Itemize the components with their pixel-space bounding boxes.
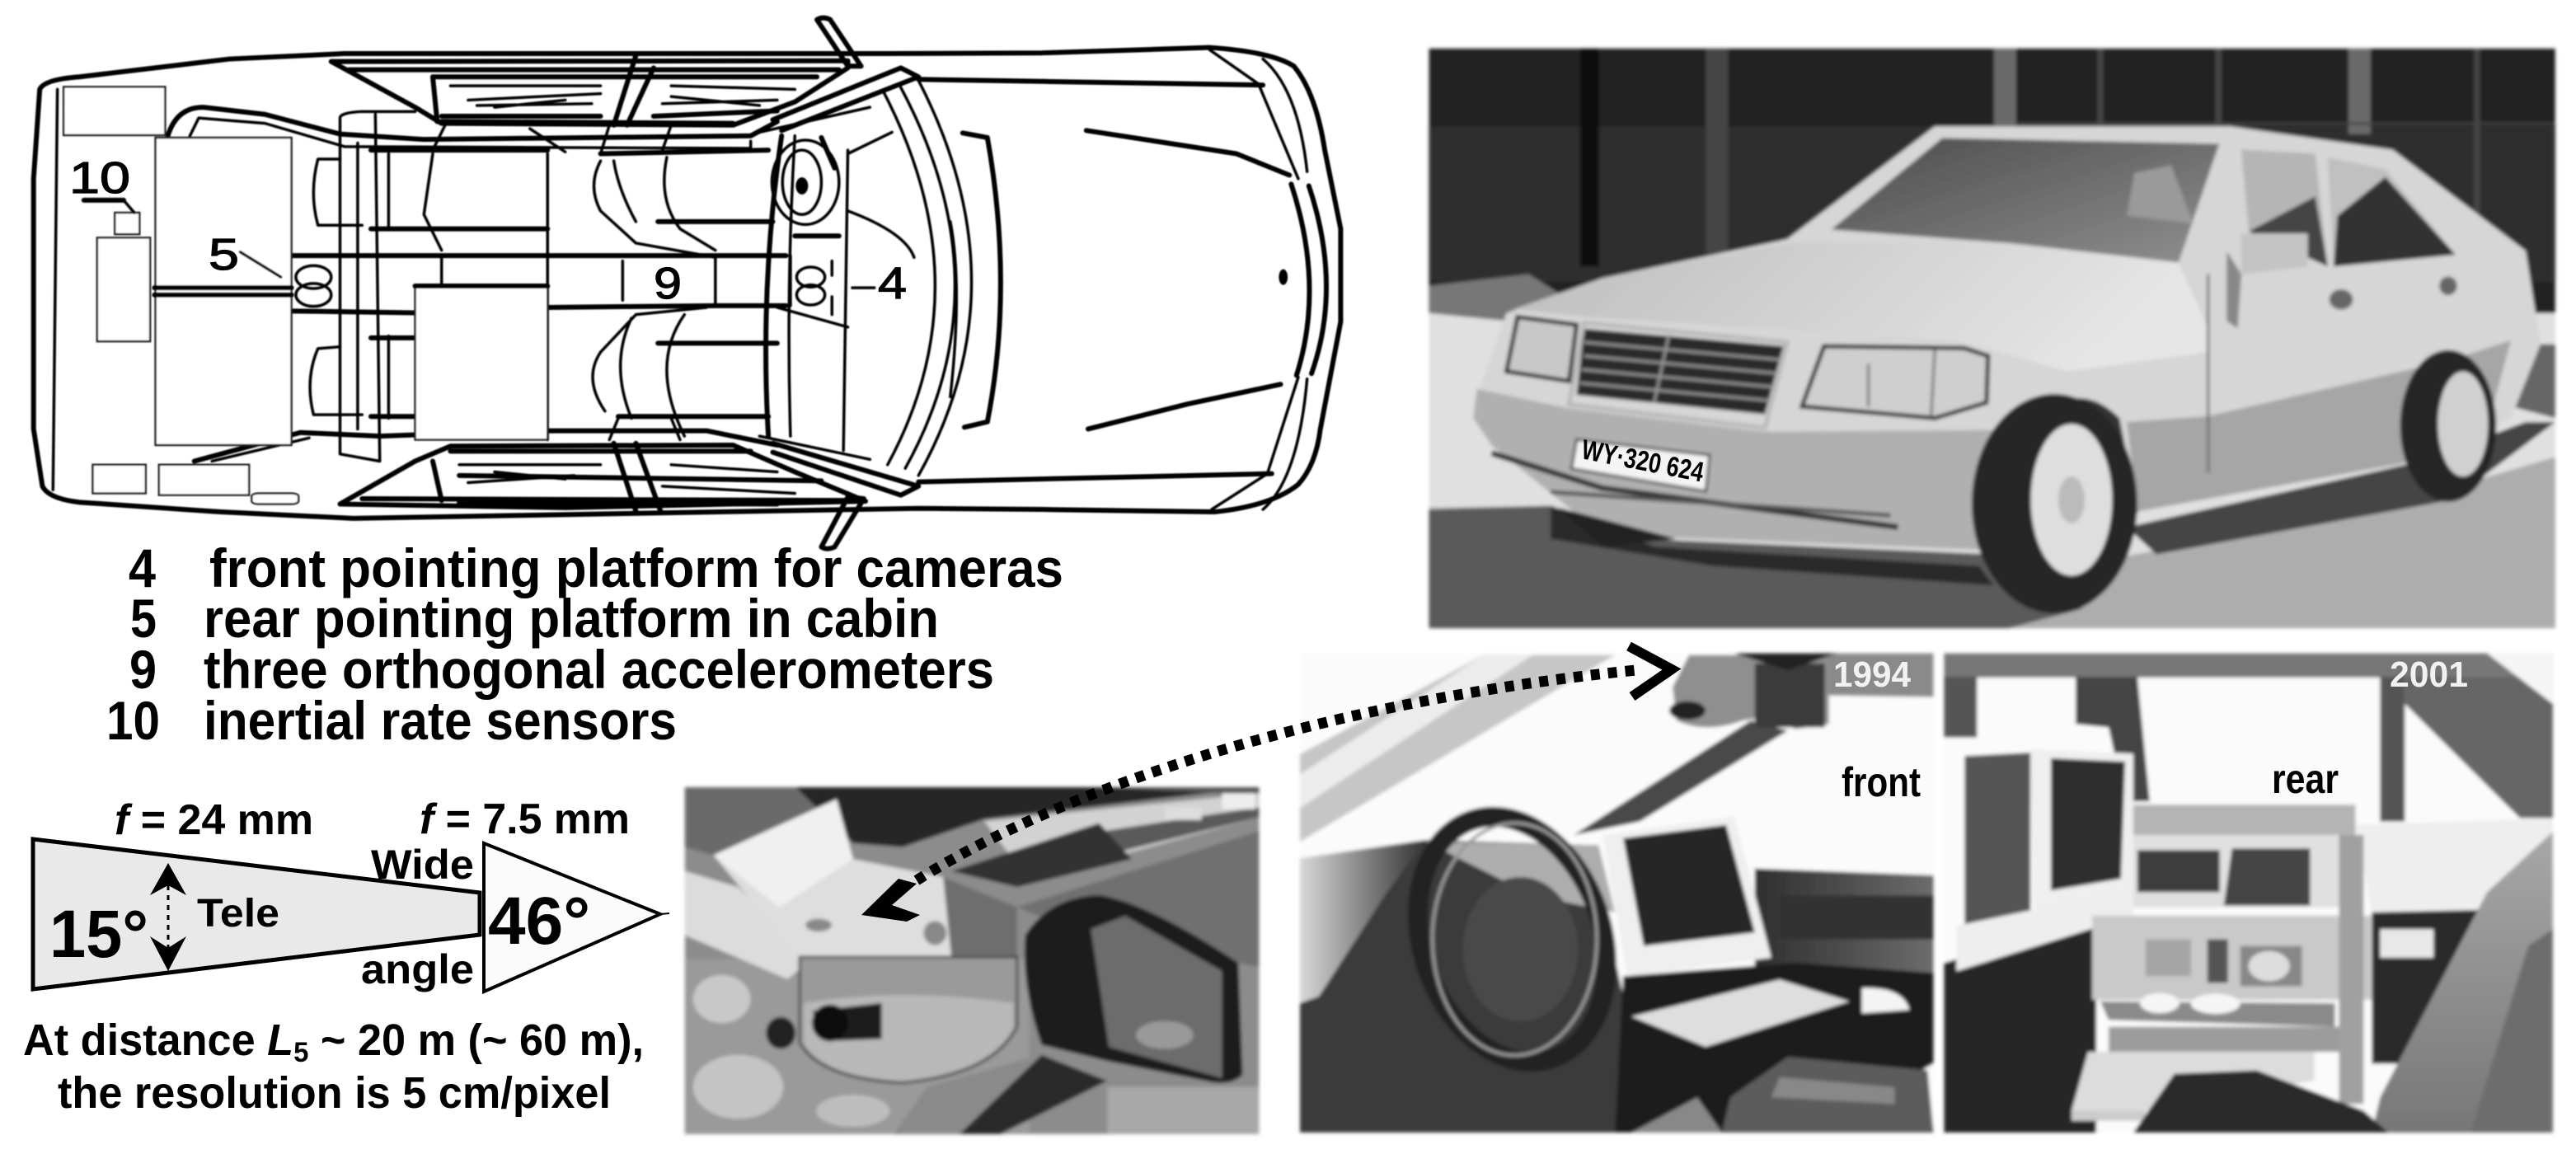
photo captions: rear [2272, 756, 2339, 802]
side windows [2241, 150, 2328, 266]
windscreen [1832, 138, 2219, 262]
a pillars [772, 68, 918, 130]
keyboard [2072, 1052, 2315, 1111]
right seat [2372, 832, 2553, 1133]
field of view diagram: f = 7.5 mm [420, 795, 630, 843]
front seats [594, 157, 716, 257]
steering wheel [1463, 877, 1578, 1021]
monitor [1602, 817, 1771, 976]
door panel [1755, 869, 1933, 1063]
tunnel [292, 256, 786, 312]
legend list: 9 [129, 639, 157, 700]
steering wheel [772, 140, 839, 224]
field of view diagram: 15° [49, 897, 148, 972]
legend list: front pointing platform for cameras [209, 537, 1063, 598]
field of view diagram [23, 795, 669, 1118]
field of view diagram: the resolution is 5 cm/pixel [58, 1068, 611, 1118]
windscreen arcs [883, 81, 972, 476]
resolution note: 5 [293, 1037, 308, 1068]
front wheel [2024, 398, 2138, 551]
photo: vehicle front three-quarter view [1429, 49, 2555, 628]
front left tyre [1558, 508, 1677, 547]
photo captions: front [1842, 759, 1921, 805]
field of view diagram: Wide [371, 842, 474, 888]
hood [1513, 243, 2208, 372]
hood creases [918, 79, 1272, 482]
legend list: 4 [129, 537, 156, 598]
car label numbers [69, 153, 907, 308]
mirror [2241, 233, 2308, 274]
field of view diagram: angle [361, 946, 474, 992]
leader lines [84, 198, 124, 203]
car line drawing [34, 18, 1340, 549]
legend list: inertial rate sensors [204, 690, 677, 751]
grille [1577, 329, 1784, 415]
cross rails [340, 111, 415, 461]
photo: front cabin 1994 [1300, 654, 1933, 1133]
fov labels: f = 24 mm [115, 796, 313, 844]
legend list [106, 537, 1063, 751]
rear wheel [2400, 350, 2496, 502]
grille [1291, 184, 1309, 375]
field of view diagram: 46° [488, 884, 590, 959]
mirrors [817, 18, 861, 66]
platforms [296, 261, 832, 315]
car label numbers: 10 [69, 153, 130, 203]
diagram: top-down car cutaway with sensor positions [34, 18, 1340, 549]
rear gear boxes [63, 87, 165, 135]
body outline [34, 48, 1340, 518]
number plate text: WY·320 624 [1579, 434, 1706, 488]
body [1473, 126, 2541, 551]
tele cone [33, 839, 480, 989]
photo captions [1833, 654, 2468, 805]
car label numbers: 5 [209, 230, 239, 279]
equipment rack [2133, 805, 2355, 835]
car label numbers: 4 [878, 259, 907, 308]
legend list: 5 [130, 588, 157, 649]
legend list: rear pointing platform in cabin [204, 588, 939, 649]
small camera dome and mirror [1669, 654, 1837, 729]
left monitors [1964, 753, 2030, 926]
keyboard [1631, 979, 1850, 1047]
door window top [331, 61, 848, 125]
door handles [2330, 289, 2353, 310]
interior roof rails [168, 107, 777, 139]
headlights [1802, 346, 1988, 418]
dashboard [766, 136, 781, 436]
number plate [1571, 439, 1710, 491]
lower door tone [2127, 340, 2511, 512]
car label numbers: 9 [654, 259, 682, 308]
right dash [2355, 819, 2553, 912]
legend list: 10 [106, 690, 160, 751]
arrow: dotted link from platform photo to cabin [861, 646, 1672, 922]
rear seats [310, 159, 362, 415]
photo: rear cabin 2001 [1944, 654, 2553, 1133]
left lower [1944, 919, 2096, 1133]
resolution note: ~ 20 m (~ 60 m), [308, 1016, 644, 1065]
dashboard left [1300, 840, 1631, 1133]
legend list: three orthogonal accelerometers [204, 639, 994, 700]
wide cone [484, 843, 660, 992]
photo captions: 1994 [1833, 654, 1912, 695]
photo: camera platform closeup [685, 787, 1259, 1134]
door window bottom [340, 445, 866, 508]
wiper [963, 133, 1001, 427]
bumper [1473, 389, 2024, 551]
tele angle arrows [150, 863, 186, 971]
photo captions: 2001 [2390, 654, 2468, 695]
console [1722, 1057, 1933, 1133]
center seat [2133, 1071, 2388, 1133]
field of view diagram: Tele [197, 892, 279, 936]
resolution note: At distance L [23, 1016, 294, 1065]
